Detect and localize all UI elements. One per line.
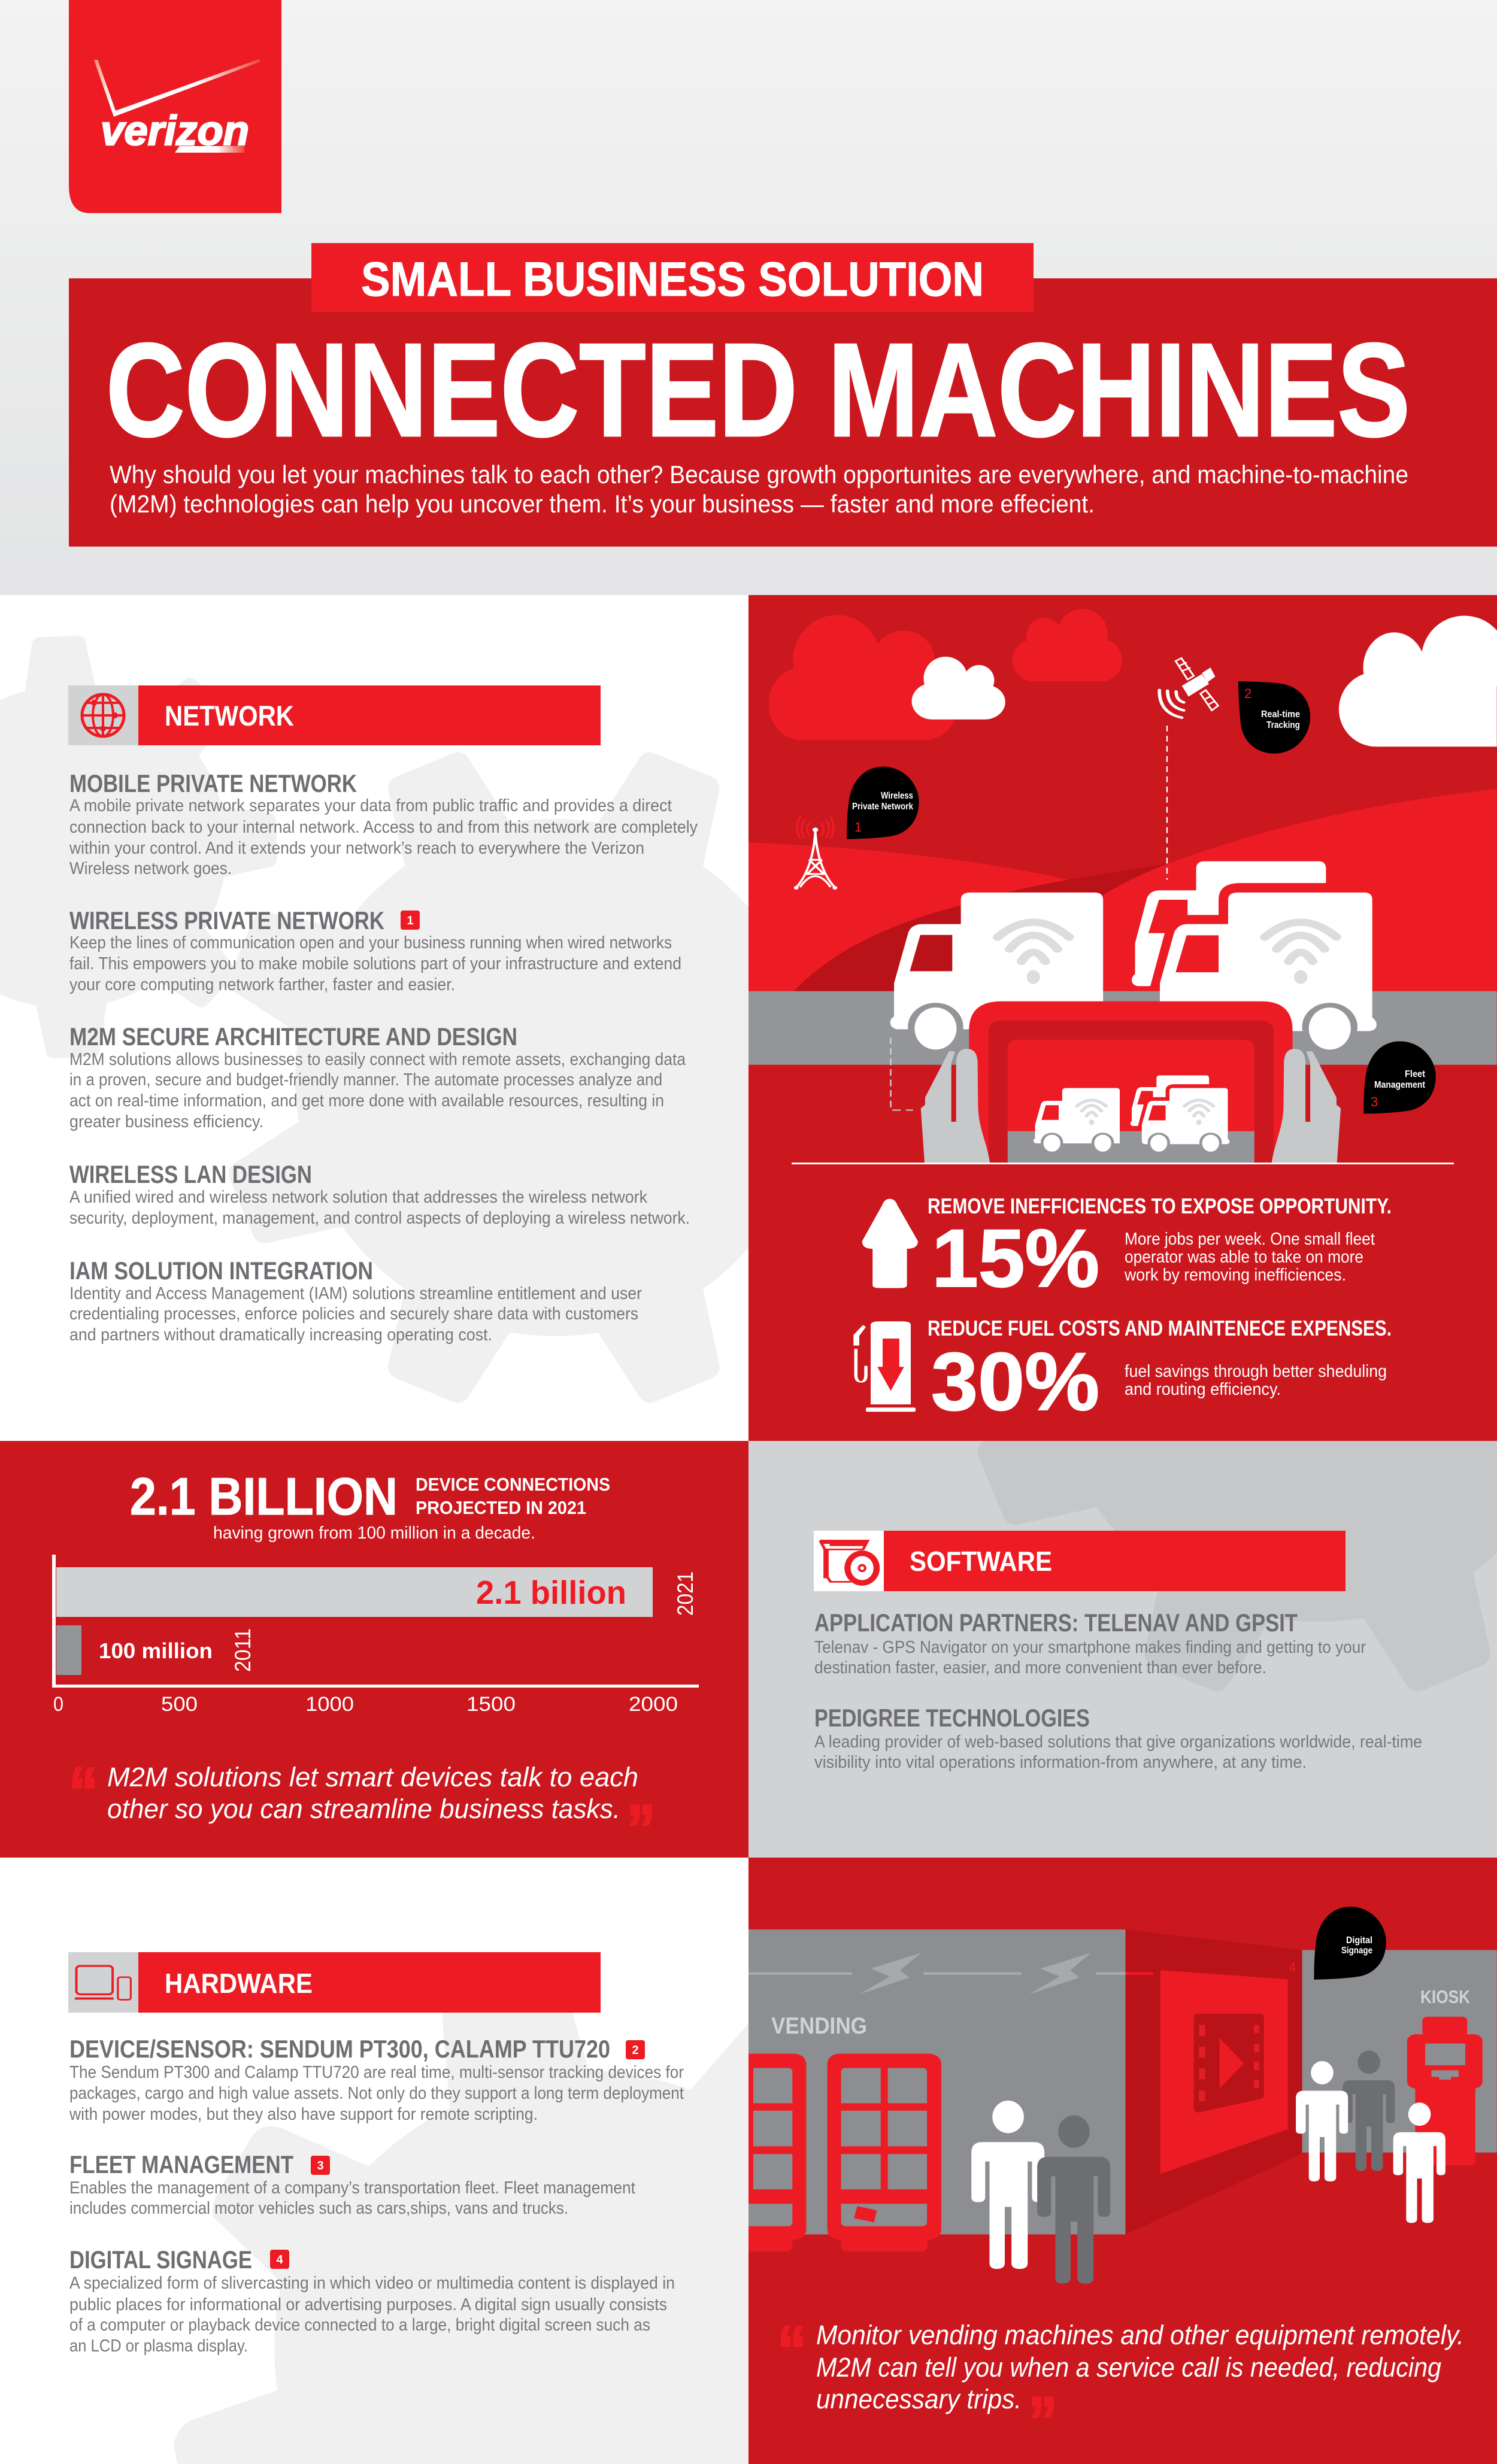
block: fleet management: Enables the management of a company’s transportation fleet. Fleet management (69, 2178, 635, 2198)
callout 1 text: Wireless (881, 791, 913, 801)
cloud: large white (1339, 615, 1497, 747)
quote: “ (777, 2313, 807, 2389)
label: vending: VENDING (771, 2013, 867, 2039)
dashed signal line: truck to hand (891, 1037, 913, 1110)
stat heading: REMOVE INEFFICIENCES TO EXPOSE OPPORTUNITY. (928, 1194, 1392, 1218)
block: IAM solution integration: Identity and Access Management (IAM) solutions streamline entitlement and user (69, 1284, 642, 1303)
bar chart: 2.1 billion (476, 1574, 626, 1611)
callout 3 text: Management (1374, 1080, 1426, 1090)
hardware header bar (138, 1952, 601, 2013)
block: digital signage (69, 2245, 675, 2356)
bar chart: 0 (53, 1693, 63, 1716)
block: wireless LAN design: security, deployment, management, and control aspects of deploying a wireless network. (69, 1209, 690, 1228)
block: mobile private network: within your control. And it extends your network’s reach to everywhere the Verizon (69, 839, 644, 858)
callout shape 2 (1238, 681, 1310, 754)
block: device sensor (69, 2035, 684, 2124)
headline label (416, 1474, 610, 1518)
stat heading: REDUCE FUEL COSTS AND MAINTENECE EXPENSES. (928, 1316, 1392, 1340)
block: wireless private network: Keep the lines of communication open and your business running when wired networks (69, 933, 672, 952)
block: application partners: APPLICATION PARTNERS: TELENAV AND GPSIT (814, 1609, 1298, 1637)
quote: “ (69, 1754, 98, 1831)
block: mobile private network: A mobile private network separates your data from public traffic and provides a direct (69, 796, 672, 815)
stat: reduce fuel costs (853, 1316, 1392, 1428)
cloud: middle red (1013, 609, 1122, 681)
headline label: PROJECTED IN 2021 (416, 1497, 586, 1518)
stat description: operator was able to take on more (1125, 1248, 1363, 1267)
person: small white front (1393, 2102, 1446, 2223)
block: mobile private network: Wireless network goes. (69, 859, 232, 878)
network header bar (138, 685, 601, 745)
headline value: 2.1 BILLION (130, 1467, 398, 1526)
person: small gray (1343, 2050, 1395, 2171)
callout 3 text: 3 (1371, 1094, 1378, 1109)
block: device sensor: 2 (632, 2044, 639, 2057)
block: mobile private network: connection back to your internal network. Access to and from this network are completely (69, 818, 698, 837)
block: wireless private network: 1 (407, 914, 414, 927)
hardware heading: HARDWARE (165, 1968, 313, 1999)
hardware icon: laptop and phone (68, 1952, 138, 2013)
hand: right (1272, 1049, 1341, 1164)
quote: M2M can tell you when a service call is needed, reducing (816, 2352, 1441, 2383)
quote: unnecessary trips. (816, 2384, 1022, 2414)
block: device sensor: packages, cargo and high value assets. Not only do they support a long term deployment (69, 2084, 684, 2103)
network icon: globe (68, 685, 138, 745)
block: wireless LAN design: A unified wired and wireless network solution that addresses the wireless network (69, 1188, 647, 1207)
mini truck: right (1142, 1088, 1229, 1152)
page background: header band (0, 0, 1497, 595)
block: M2M secure architecture: M2M SECURE ARCHITECTURE AND DESIGN (69, 1022, 517, 1051)
divider line (792, 1163, 1454, 1164)
logo z underline (175, 146, 244, 153)
bar chart: 2000 (629, 1693, 678, 1716)
road (748, 991, 1497, 1065)
panel: software (748, 1441, 1497, 1858)
truck: right (1160, 893, 1377, 1051)
block: IAM solution integration (69, 1257, 642, 1345)
bar chart: 1000 (305, 1693, 354, 1716)
panel: title banner (69, 243, 1497, 547)
block: fleet management: 3 (317, 2159, 324, 2172)
block: IAM solution integration: IAM SOLUTION INTEGRATION (69, 1257, 373, 1285)
block: wireless private network: WIRELESS PRIVATE NETWORK (69, 906, 384, 934)
callout 4 text: Digital (1346, 1935, 1372, 1946)
quote: other so you can streamline business tasks. (107, 1794, 620, 1824)
software header bar (884, 1531, 1346, 1591)
background gear (174, 1999, 748, 2464)
block: application partners (814, 1609, 1366, 1677)
callout 4 text: 4 (1289, 1960, 1296, 1975)
headline label: DEVICE CONNECTIONS (416, 1474, 610, 1495)
panel: vending and kiosk scene (748, 1858, 1497, 2464)
dashed signal line: satellite to truck (1166, 726, 1168, 880)
block: M2M secure architecture (69, 1022, 686, 1131)
subtitle tab (311, 243, 1034, 312)
software heading: SOFTWARE (910, 1546, 1052, 1577)
block: M2M secure architecture: greater business efficiency. (69, 1112, 263, 1131)
block: fleet management: FLEET MANAGEMENT (69, 2150, 293, 2178)
quote: M2M solutions let smart devices talk to each (107, 1762, 638, 1792)
block: fleet management (69, 2150, 635, 2218)
callout 4 text (1289, 1935, 1372, 1975)
block: digital signage: DIGITAL SIGNAGE (69, 2245, 252, 2274)
bar chart (52, 1555, 699, 1716)
stat value: 15% (932, 1213, 1099, 1304)
hills (748, 789, 1497, 991)
block: mobile private network (69, 769, 698, 878)
block: M2M secure architecture: M2M solutions allows businesses to easily connect with remote assets, exchanging data (69, 1050, 686, 1069)
vending machine: full (828, 2053, 941, 2251)
label: kiosk: KIOSK (1420, 1986, 1471, 2007)
vending machine: partial (748, 2053, 806, 2251)
block: wireless private network (69, 906, 681, 994)
stat description: More jobs per week. One small fleet (1125, 1230, 1375, 1249)
block: IAM solution integration: and partners without dramatically increasing operating cost. (69, 1325, 492, 1345)
network heading: NETWORK (165, 700, 294, 732)
signal line (748, 1953, 1153, 1994)
block: device sensor: The Sendum PT300 and Calamp TTU720 are real time, multi-sensor tracking devices for (69, 2063, 684, 2082)
hand: left (921, 1049, 990, 1164)
icon: Verizon check mark (94, 59, 260, 117)
block: application partners: Telenav - GPS Navigator on your smartphone makes finding and getting to your (814, 1638, 1366, 1657)
callout shape 4 (1314, 1907, 1386, 1980)
bar chart: 2021 (673, 1571, 698, 1616)
quote: ” (626, 1791, 656, 1868)
block: device sensor: DEVICE/SENSOR: SENDUM PT300, CALAMP TTU720 (69, 2035, 610, 2063)
panel: network (0, 636, 748, 1403)
callout 3 text: Fleet (1405, 1069, 1426, 1079)
block: digital signage: A specialized form of slivercasting in which video or multimedia content is displayed in (69, 2274, 675, 2293)
background gears (0, 629, 996, 1519)
truck: rear (1132, 861, 1326, 986)
panel: Verizon logo (69, 0, 281, 213)
software icon: box and disc (814, 1531, 884, 1591)
kiosk (1407, 2017, 1483, 2165)
block: digital signage: an LCD or plasma display. (69, 2336, 248, 2356)
bar chart: 100 million (99, 1638, 213, 1663)
callout 1 text (852, 791, 913, 835)
quote (777, 2313, 1464, 2460)
right wall (1302, 1950, 1497, 2153)
block: digital signage: 4 (276, 2253, 283, 2266)
tablet (969, 1002, 1293, 1178)
block: wireless LAN design (69, 1160, 690, 1228)
block: IAM solution integration: credentialing processes, enforce policies and securely share data with customers (69, 1304, 638, 1324)
quote (69, 1754, 656, 1868)
quote: ” (1028, 2383, 1057, 2460)
callout 4 text: Signage (1341, 1946, 1372, 1956)
quote: Monitor vending machines and other equipment remotely. (816, 2320, 1464, 2350)
callout 1 text: 1 (854, 820, 862, 835)
block: mobile private network: MOBILE PRIVATE NETWORK (69, 769, 357, 797)
stat value: 30% (931, 1336, 1099, 1428)
icon: satellite (1159, 658, 1218, 718)
stat: remove inefficiencies (862, 1194, 1392, 1304)
block: wireless private network: fail. This empowers you to make mobile solutions part of your infrastructure and extend (69, 954, 681, 973)
intro line 2: (M2M) technologies can help you uncover them. It’s your business — faster and more effecient. (110, 490, 1095, 518)
callout 2 text: 2 (1244, 686, 1251, 701)
signage block side (1126, 1929, 1302, 2234)
block: device sensor: with power modes, but they also have support for remote scripting. (69, 2105, 538, 2124)
illustration: scene (748, 1907, 1497, 2284)
callout shape 3 (1363, 1041, 1436, 1114)
block: pedigree technologies (814, 1704, 1422, 1772)
illustration: connected fleet (748, 609, 1497, 1178)
block: pedigree technologies: visibility into vital operations information-from anywhere, at any time. (814, 1753, 1307, 1772)
left wall (748, 1929, 1126, 2234)
background gear (856, 890, 1497, 1813)
callout 2 text: Real-time (1261, 709, 1300, 720)
stat description: fuel savings through better sheduling (1125, 1362, 1387, 1381)
block: wireless private network: your core computing network farther, faster and easier. (69, 975, 455, 994)
panel: device connections chart (0, 1441, 748, 1868)
icon: fuel pump (853, 1321, 916, 1412)
person: gray (1037, 2116, 1110, 2284)
truck: left (890, 893, 1103, 1051)
person: small white (1296, 2061, 1348, 2181)
digital screen (1160, 1970, 1288, 2174)
stat description: work by removing inefficiences. (1124, 1266, 1346, 1285)
stat description (1125, 1362, 1387, 1399)
person: white (971, 2101, 1044, 2269)
block: M2M secure architecture: in a proven, secure and budget-friendly manner. The automate processes analyze and (69, 1070, 662, 1090)
intro line 1: Why should you let your machines talk to each other? Because growth opportunites are everywhere, and machine-to-machine (110, 460, 1408, 488)
mini truck: rear (1131, 1075, 1209, 1126)
callout 1 text: Private Network (852, 802, 913, 812)
cloud: small white (912, 657, 1005, 720)
icon: up arrow (862, 1199, 918, 1288)
block: digital signage: public places for informational or advertising purposes. A digital sign usually consists (69, 2295, 667, 2314)
stat description: and routing efficiency. (1125, 1380, 1281, 1399)
block: digital signage: of a computer or playback device connected to a large, bright digital screen such as (69, 2316, 650, 2335)
mini truck: left (1034, 1088, 1120, 1152)
block: pedigree technologies: A leading provider of web-based solutions that give organizations worldwide, real-time (814, 1732, 1422, 1752)
block: wireless LAN design: WIRELESS LAN DESIGN (69, 1160, 312, 1188)
callout 2 text (1244, 686, 1300, 730)
callout 2 text: Tracking (1266, 720, 1300, 730)
block: M2M secure architecture: act on real-time information, and get more done with available resources, resulting in (69, 1091, 664, 1110)
block: fleet management: includes commercial motor vehicles such as cars,ships, vans and trucks. (69, 2199, 568, 2218)
bar chart: 1500 (466, 1693, 516, 1716)
icon: radio tower (794, 817, 837, 890)
callout shape 1 (847, 767, 919, 839)
panel: hardware (0, 1858, 748, 2464)
headline note: having grown from 100 million in a decade. (213, 1524, 535, 1543)
block: pedigree technologies: PEDIGREE TECHNOLOGIES (814, 1704, 1090, 1732)
text: verizon wordmark: verizon (101, 107, 249, 154)
panel: fleet illustration and stats (748, 595, 1497, 1442)
block: application partners: destination faster, easier, and more convenient than ever before. (814, 1658, 1266, 1677)
bar chart: 500 (161, 1693, 198, 1716)
stat description (1124, 1230, 1375, 1285)
callout 3 text (1371, 1069, 1426, 1109)
cloud: large red (768, 615, 956, 740)
bar chart: 2011 (231, 1628, 255, 1672)
subtitle: SMALL BUSINESS SOLUTION (361, 253, 984, 307)
